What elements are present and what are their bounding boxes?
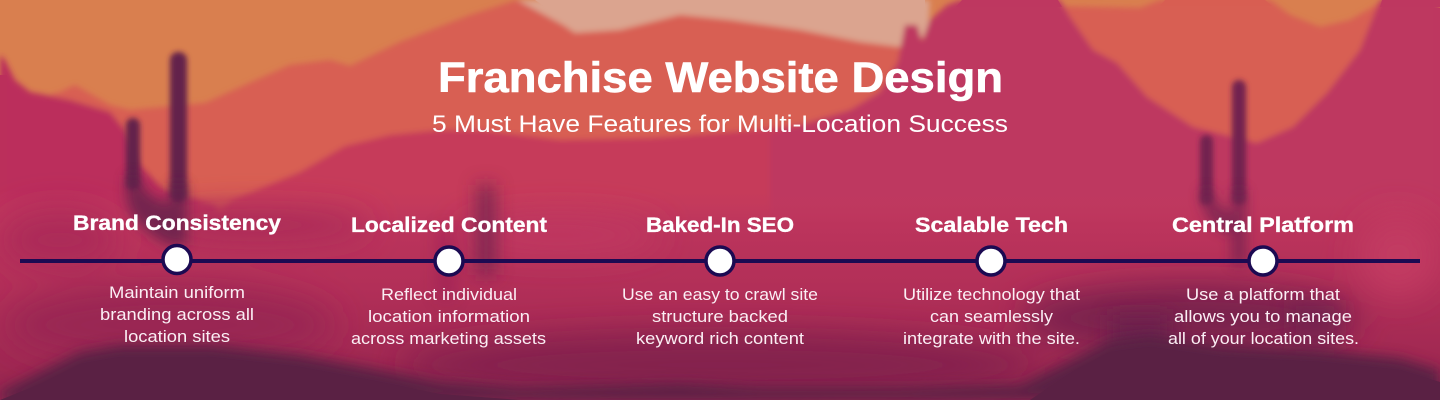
soft mid-ground shading [0, 210, 1438, 398]
feature 3: Baked-In SEO: Baked-In SEO [646, 213, 794, 237]
feature 5: Central Platform: allows you to manage [1174, 308, 1352, 326]
left large cactus [126, 52, 187, 245]
feature 2: Localized Content [351, 213, 547, 348]
feature 4: Scalable Tech: integrate with the site. [903, 330, 1080, 348]
feature 3: Baked-In SEO: keyword rich content [636, 330, 804, 348]
feature 5: Central Platform: Central Platform [1172, 213, 1354, 237]
feature 3: Baked-In SEO: Use an easy to crawl site [622, 286, 818, 304]
subtitle: 5 Must Have Features for Multi-Location Success [432, 111, 1008, 138]
title: Franchise Website Design [438, 54, 1003, 102]
feature 2: Localized Content: Localized Content [351, 213, 547, 237]
timeline line [20, 259, 1420, 263]
feature 1: Brand Consistency [73, 211, 281, 346]
feature 2: Localized Content: location information [368, 308, 530, 326]
feature 4: Scalable Tech: Utilize technology that [903, 286, 1080, 304]
feature 1: Brand Consistency: Brand Consistency [73, 211, 281, 235]
feature 1: Brand Consistency: Maintain uniform [109, 284, 245, 302]
feature 1: Brand Consistency: location sites [124, 328, 230, 346]
feature 3: Baked-In SEO [622, 213, 818, 348]
feature 5: Central Platform: all of your location sites. [1168, 330, 1359, 348]
feature 2: Localized Content: Reflect individual [381, 286, 517, 304]
blurred distant cacti [440, 185, 1340, 355]
feature 3: Baked-In SEO: structure backed [652, 308, 788, 326]
feature 4: Scalable Tech: Scalable Tech [915, 213, 1068, 237]
feature 4: Scalable Tech [903, 213, 1080, 348]
feature 1: Brand Consistency: branding across all [100, 306, 254, 324]
feature 5: Central Platform: Use a platform that [1186, 286, 1340, 304]
lower gradient field [0, 190, 1440, 400]
feature 4: Scalable Tech: can seamlessly [930, 308, 1054, 326]
feature 5: Central Platform [1168, 213, 1359, 348]
right large cactus [1200, 80, 1246, 265]
feature 2: Localized Content: across marketing assets [351, 330, 546, 348]
dark foreground hill [0, 335, 1440, 400]
